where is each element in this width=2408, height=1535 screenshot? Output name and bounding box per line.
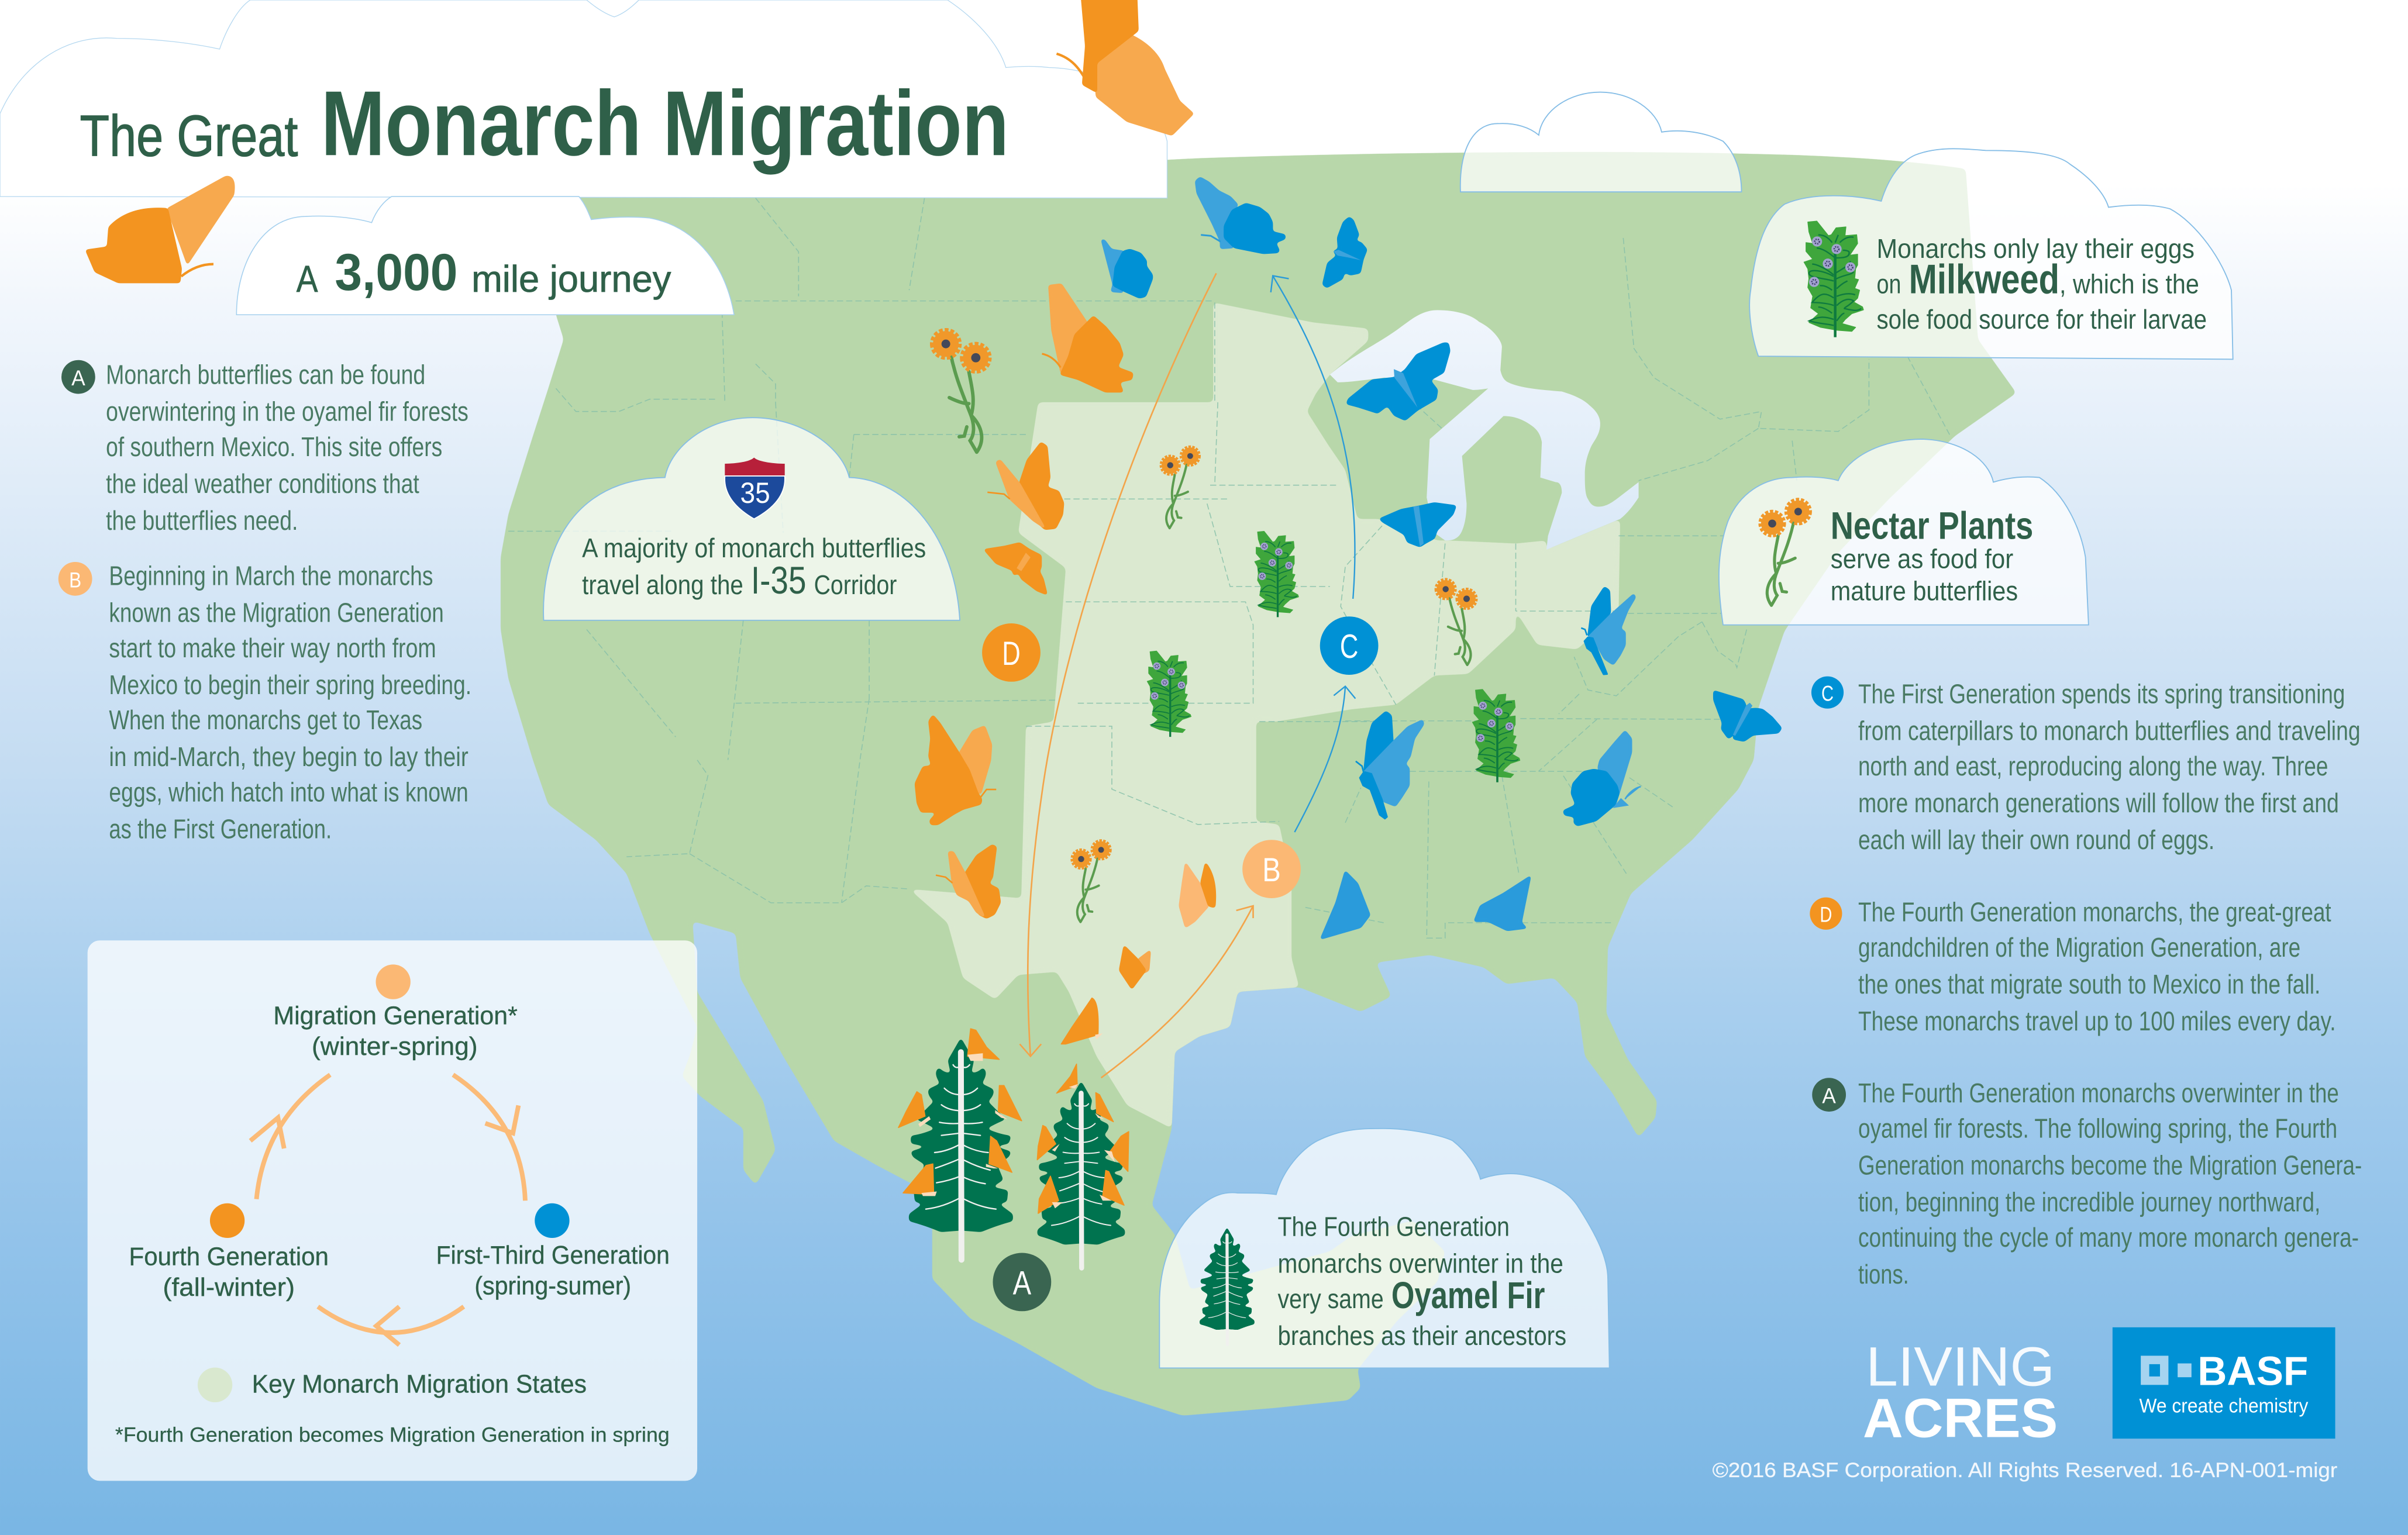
icon: interstate 35 shield: 35: [740, 477, 770, 509]
butterfly: blue, alabama: [1475, 876, 1531, 930]
panel: generation cycle legend: [88, 940, 697, 1481]
arrow: migration to first-third: [453, 1075, 525, 1201]
callout: oyamel fir: very same: [1278, 1284, 1384, 1314]
text block: B spring migration: as the First Generation.: [109, 814, 332, 844]
title: Monarch Migration: [321, 72, 1009, 175]
icon: interstate 35 shield: [725, 457, 785, 519]
text block: D fourth generation: grandchildren of the Migration Generation, are: [1858, 932, 2300, 963]
legend: key states: [198, 1368, 587, 1402]
callout: I-35 corridor: Corridor: [814, 570, 897, 600]
label: fourth generation: Fourth Generation: [129, 1243, 329, 1271]
text block: A fourth generation overwinter: tions.: [1858, 1259, 1909, 1289]
cloud: top decorative: [1460, 92, 1741, 192]
text block: B spring migration: [58, 560, 471, 844]
callout: nectar plants: serve as food for: [1831, 543, 2013, 574]
callout: nectar plants: Nectar Plants: [1831, 505, 2033, 547]
icon: fir tree: [1200, 1229, 1254, 1344]
butterfly: orange, new mexico: [915, 715, 996, 825]
callout marker C: C: [1340, 628, 1358, 665]
text block: B spring migration: eggs, which hatch into what is known: [109, 777, 468, 808]
icon: nectar plant, north plains: [933, 331, 988, 452]
cloud: 3,000 mile journey: 3,000: [335, 243, 457, 301]
callout marker B: B: [1262, 851, 1281, 889]
map of North America: [501, 152, 2016, 1416]
butterfly: orange, nebraska border: [984, 543, 1047, 595]
label: migration generation: [273, 1002, 518, 1061]
callout marker D: D: [1002, 635, 1021, 672]
cloud: 3,000 mile journey: [236, 196, 734, 315]
text block: C first generation: [1811, 677, 2361, 855]
logo: BASF: We create chemistry: [2140, 1395, 2308, 1417]
label: fourth generation: [129, 1243, 329, 1302]
logo: Living Acres: [1863, 1336, 2058, 1450]
icon: milkweed: [1804, 221, 1863, 337]
butterfly: orange, beside journey cloud: [86, 177, 234, 282]
bullet A: A: [1822, 1084, 1836, 1108]
butterfly: blue, carolinas: [1563, 731, 1641, 826]
arrow: C north: [1271, 276, 1355, 599]
callout marker A: A: [1013, 1264, 1031, 1302]
butterfly: orange, rio grande: [1061, 998, 1103, 1044]
arrow: first-third to fourth: [318, 1306, 464, 1345]
text block: A overwintering: Monarch butterflies can be found: [106, 359, 425, 389]
state borders: [508, 198, 1951, 938]
title: [80, 72, 1009, 175]
butterfly: orange, dakota border: [987, 443, 1063, 529]
text block: A overwintering: the ideal weather conditions that: [106, 468, 419, 499]
label: first-third generation: [436, 1241, 670, 1300]
bullet A: [61, 360, 95, 394]
butterfly: orange, west texas: [936, 845, 1000, 918]
arrow: spring migration to B: [1101, 906, 1253, 1078]
bullet B: [58, 562, 92, 596]
bullet B: B: [69, 568, 81, 592]
text block: B spring migration: Beginning in March the monarchs: [109, 560, 433, 591]
callout: I-35 corridor: A majority of monarch butterflies: [582, 533, 926, 563]
callout: oyamel fir: Oyamel Fir: [1391, 1274, 1545, 1316]
bullet A: [1812, 1078, 1846, 1112]
text block: A fourth generation overwinter: [1812, 1078, 2362, 1289]
logo: Living Acres: ACRES: [1863, 1388, 2058, 1450]
text block: B spring migration: known as the Migration Generation: [109, 597, 444, 627]
callout marker D: [982, 623, 1041, 682]
text block: C first generation: each will lay their own round of eggs.: [1858, 825, 2214, 855]
callout marker B: [1242, 840, 1301, 898]
callout: oyamel fir: monarchs overwinter in the: [1278, 1248, 1563, 1279]
text block: B spring migration: Mexico to begin their spring breeding.: [109, 670, 471, 700]
label: first-third generation: (spring-sumer): [474, 1272, 631, 1300]
dot: first-third generation: [535, 1203, 570, 1238]
bullet C: [1811, 677, 1844, 709]
callout: I-35 corridor: travel along the: [582, 570, 743, 600]
logo: Living Acres: LIVING: [1866, 1336, 2055, 1398]
callout: milkweed: [1749, 149, 2233, 359]
arrow: fourth to migration: [250, 1075, 330, 1199]
callout: nectar plants: [1719, 439, 2089, 625]
label: fourth generation: (fall-winter): [163, 1274, 295, 1302]
text block: A overwintering: [61, 359, 468, 536]
copyright: ©2016 BASF Corporation. All Rights Reserved. 16-APN-001-migr: [1713, 1458, 2337, 1482]
bullet C: C: [1821, 682, 1834, 706]
arrow: D fall migration south: [1019, 273, 1217, 1056]
icon: milkweed, iowa: [1255, 531, 1298, 617]
logo: BASF: [2113, 1327, 2335, 1439]
callout marker A: [993, 1253, 1051, 1311]
butterfly: blue, ohio valley: [1581, 587, 1635, 674]
text block: D fourth generation: [1810, 896, 2336, 1036]
icon: milkweed, kansas: [1147, 651, 1191, 737]
text block: A overwintering: of southern Mexico. This site offers: [106, 432, 442, 462]
butterfly: blue, lake michigan: [1380, 503, 1456, 547]
icon: fir tree left: [910, 1040, 1012, 1260]
callout marker C: [1320, 616, 1379, 675]
icon: fir tree right: [1038, 1082, 1124, 1268]
butterfly: blue, lake superior: [1347, 343, 1450, 420]
text block: A overwintering: overwintering in the oyamel fir forests: [106, 396, 468, 426]
icon: nectar plant, texas: [1073, 841, 1110, 922]
label: migration generation: (winter-spring): [312, 1033, 478, 1061]
text block: B spring migration: start to make their way north from: [109, 633, 436, 663]
label: first-third generation: First-Third Generation: [436, 1241, 670, 1270]
callout: oyamel fir: branches as their ancestors: [1278, 1320, 1566, 1351]
butterfly: orange, south texas: [1119, 946, 1150, 989]
cloud: 3,000 mile journey: A: [297, 258, 318, 300]
title cloud: [0, 0, 1167, 198]
callout: nectar plants: mature butterflies: [1831, 576, 2018, 606]
bullet D: [1810, 898, 1842, 930]
callout: oyamel fir: The Fourth Generation: [1278, 1212, 1510, 1242]
callout: milkweed: , which is the: [2059, 268, 2199, 299]
icon: milkweed, kentucky: [1472, 689, 1520, 782]
butterfly: orange, top of title: [1056, 0, 1193, 135]
text block: A overwintering: the butterflies need.: [106, 505, 298, 536]
callout: milkweed: Monarchs only lay their eggs: [1877, 233, 2195, 264]
callout: milkweed: Milkweed: [1909, 256, 2059, 302]
icon: nectar plant: [1761, 501, 1809, 605]
label: migration generation: Migration Generation*: [273, 1002, 518, 1030]
butterfly: light orange, east texas: [1179, 863, 1215, 927]
butterfly: blue, tennessee: [1356, 712, 1424, 819]
butterfly: blue, atlantic coast: [1714, 691, 1782, 741]
text block: B spring migration: in mid-March, they begin to lay their: [109, 741, 468, 772]
logo: BASF: BASF: [2197, 1348, 2308, 1393]
cloud: 3,000 mile journey: mile journey: [471, 258, 671, 300]
butterfly: blue, left of top: [1101, 240, 1152, 298]
bullet D: D: [1820, 903, 1832, 927]
butterfly: blue, louisiana: [1321, 871, 1370, 939]
callout: I-35 corridor: I-35: [751, 559, 806, 602]
oyamel fir trees: [898, 1029, 1129, 1268]
callout: I-35 corridor: [543, 418, 960, 620]
arrow: B to C: [1294, 687, 1355, 832]
great lakes: [1330, 310, 1639, 550]
butterfly: orange, north plains: [1042, 284, 1133, 392]
text block: B spring migration: When the monarchs get to Texas: [109, 705, 422, 735]
dot: fourth generation: [210, 1203, 244, 1238]
butterfly: blue, top canada: [1196, 177, 1285, 253]
dot: migration generation: [376, 964, 411, 999]
legend: key states: Key Monarch Migration States: [252, 1370, 587, 1398]
land mass: [501, 152, 2016, 1416]
callout: oyamel fir: [1159, 1129, 1610, 1368]
footnote: *Fourth Generation becomes Migration Generation in spring: [115, 1423, 670, 1446]
key monarch migration states: [909, 302, 1620, 1129]
title: The Great: [80, 104, 298, 169]
icon: nectar plant, illinois: [1436, 580, 1476, 665]
callout: milkweed: sole food source for their larvae: [1877, 304, 2207, 334]
bullet A: A: [71, 366, 85, 390]
callout: milkweed: on: [1877, 268, 1901, 299]
icon: nectar plant, dakotas: [1162, 447, 1199, 528]
butterfly: blue, right of top: [1323, 218, 1367, 288]
butterflies roosting on the firs: [898, 1029, 1129, 1213]
